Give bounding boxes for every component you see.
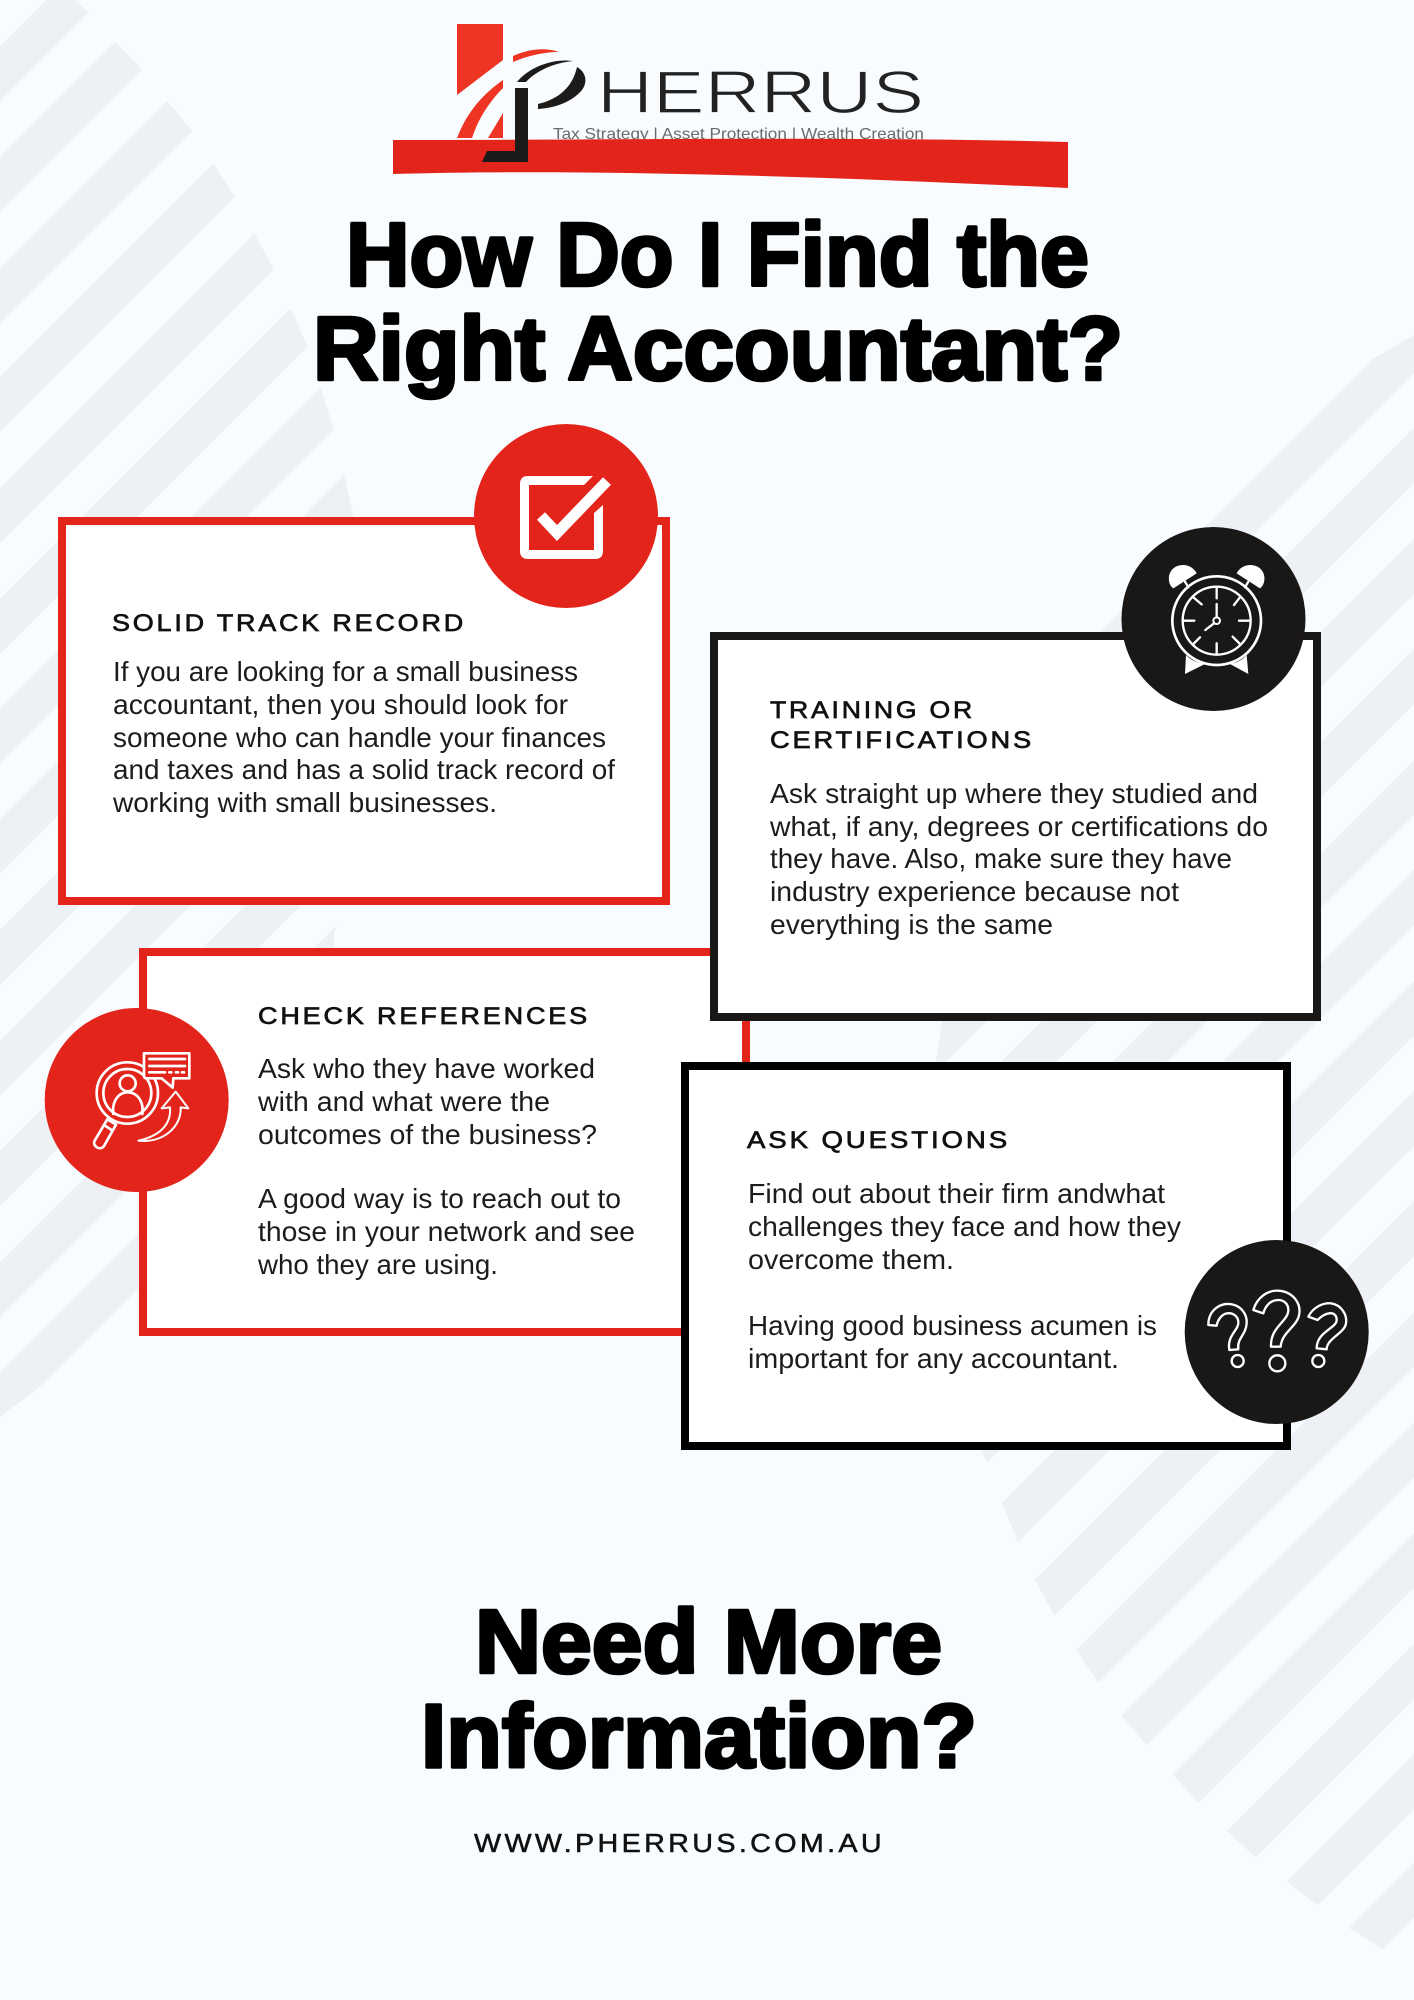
logo: Pherrus with red brush stroke <box>393 24 1068 188</box>
text: check references body <box>257 1053 635 1280</box>
call to action heading: Need More <box>475 1592 942 1692</box>
logo tagline: Tax Strategy | Asset Protection | Wealth Creation <box>553 126 924 143</box>
logo black P mark <box>482 60 585 162</box>
text: solid track record body: someone who can handle your finances <box>113 722 606 753</box>
text: ask questions body: important for any accountant. <box>748 1343 1119 1374</box>
text: training body: industry experience because not <box>770 876 1179 907</box>
red brush underline <box>393 139 1068 188</box>
icon: red circle with checkbox <box>474 424 658 608</box>
background stripes: bottom right <box>936 335 1414 1949</box>
text: ask questions body: Having good business acumen is <box>748 1310 1157 1341</box>
text: training body: they have. Also, make sure they have <box>770 843 1232 874</box>
text: solid track record body: working with small businesses. <box>112 787 497 818</box>
icon: black circle with alarm clock <box>1122 527 1306 711</box>
title: How Do I Find the <box>346 206 1089 306</box>
icon: black circle with question marks <box>1185 1240 1369 1424</box>
text: check references body: A good way is to reach out to <box>258 1183 621 1214</box>
icon: red circle with magnifier and speech bubble <box>45 1008 229 1192</box>
panel: solid track record <box>62 521 666 901</box>
call to action heading <box>421 1592 977 1787</box>
text: solid track record body: and taxes and has a solid track record of <box>113 754 615 785</box>
text: ask questions body: challenges they face and how they <box>748 1211 1181 1242</box>
heading: training or certifications <box>770 697 1034 754</box>
call to action heading: Information? <box>421 1687 977 1787</box>
text: solid track record body: accountant, then you should look for <box>113 689 568 720</box>
title <box>313 206 1123 400</box>
text: training body: everything is the same <box>770 909 1053 940</box>
panel: ask questions <box>685 1066 1287 1446</box>
text: solid track record body <box>112 656 615 818</box>
text: check references body: outcomes of the business? <box>258 1119 597 1150</box>
text: ask questions body: Find out about their firm andwhat <box>748 1178 1165 1209</box>
text: training body: Ask straight up where they studied and <box>770 778 1258 809</box>
panel: check references <box>143 952 746 1332</box>
text: training body <box>769 778 1268 940</box>
text: check references body: who they are using. <box>257 1249 498 1280</box>
panel: training or certifications <box>714 636 1317 1017</box>
heading: ask questions: ASK QUESTIONS <box>747 1127 1010 1154</box>
logo wordmark: HERRUS <box>597 59 924 126</box>
title: Right Accountant? <box>313 300 1123 400</box>
heading: training or certifications: CERTIFICATIONS <box>770 727 1034 754</box>
text: solid track record body: If you are looking for a small business <box>113 656 578 687</box>
text: check references body: Ask who they have worked <box>258 1053 595 1084</box>
background stripes: top left <box>0 0 354 1416</box>
text: check references body: with and what were the <box>257 1086 550 1117</box>
heading: solid track record: SOLID TRACK RECORD <box>112 610 466 637</box>
text: ask questions body: overcome them. <box>748 1244 954 1275</box>
logo red marks <box>457 24 559 138</box>
text: check references body: those in your network and see <box>258 1216 635 1247</box>
website address: WWW.PHERRUS.COM.AU <box>474 1828 885 1858</box>
text: ask questions body <box>748 1178 1181 1374</box>
heading: check references: CHECK REFERENCES <box>258 1003 590 1030</box>
text: training body: what, if any, degrees or certifications do <box>769 811 1268 842</box>
heading: training or certifications: TRAINING OR <box>770 697 975 724</box>
